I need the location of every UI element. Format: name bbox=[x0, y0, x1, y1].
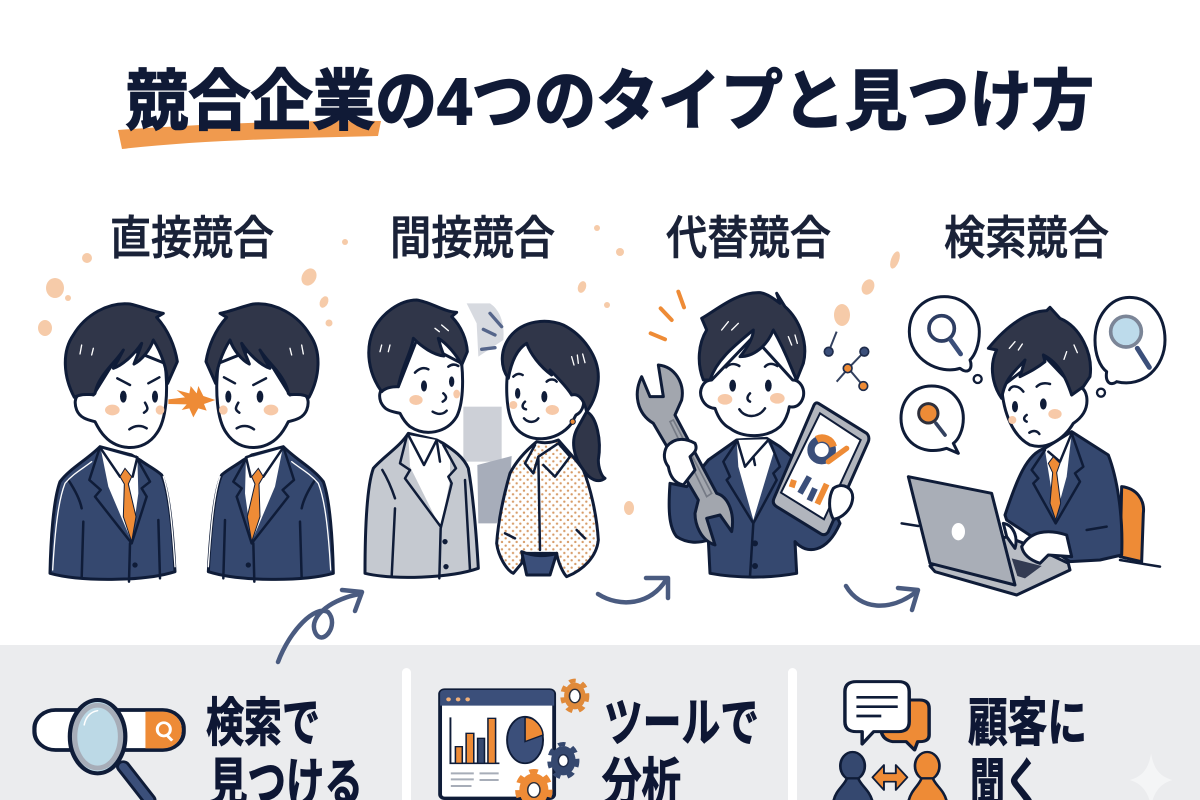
title: 競合企業の4つのタイプと見つけ方 bbox=[126, 64, 1094, 138]
man in grey suit bbox=[365, 300, 478, 578]
thought bubble with navy magnifier bbox=[909, 297, 982, 383]
man left bbox=[50, 304, 177, 582]
desk lines bbox=[902, 523, 1160, 567]
icon: chat bubbles and people bbox=[833, 682, 1173, 800]
hands on keyboard bbox=[1003, 523, 1072, 563]
label: find by search bbox=[206, 681, 363, 800]
icon: analytics window and gears bbox=[440, 681, 587, 800]
icon: orange clash spark bbox=[168, 386, 215, 417]
orange sparks bbox=[651, 292, 684, 339]
label: analyze with tools: ツールで bbox=[604, 681, 759, 756]
icon: tablet with charts bbox=[773, 403, 869, 535]
background grey shapes bbox=[463, 303, 512, 523]
hand holding wrench bbox=[664, 439, 696, 485]
heading: search competitors: 検索競合 bbox=[944, 202, 1109, 268]
figure: direct competitors facing off bbox=[50, 304, 333, 582]
label: ask customers bbox=[968, 681, 1087, 800]
icon: network nodes bbox=[824, 332, 869, 390]
heading: indirect competitors: 間接競合 bbox=[390, 202, 555, 268]
label: analyze with tools bbox=[602, 681, 759, 800]
icon: laptop bbox=[908, 477, 1070, 595]
face bbox=[701, 337, 804, 436]
arrow: to search competitors bbox=[846, 586, 918, 610]
gear navy middle bbox=[550, 744, 577, 777]
title underline brush bbox=[118, 121, 381, 149]
speech bubble with orange magnifier bbox=[901, 386, 963, 453]
label: find by search: 検索で bbox=[206, 681, 320, 756]
gear orange top bbox=[563, 681, 587, 711]
gear orange bottom bbox=[518, 771, 550, 800]
suit bbox=[1005, 432, 1122, 562]
hand holding tablet bbox=[830, 486, 853, 519]
icon: wrench bbox=[637, 365, 733, 545]
arrow: to substitute competitors bbox=[598, 578, 668, 602]
heading: direct competitors: 直接競合 bbox=[110, 202, 274, 268]
figure: search competitor at laptop bbox=[901, 297, 1165, 595]
decorative orange dots bbox=[38, 225, 902, 515]
suit bbox=[669, 438, 840, 577]
figure: substitute competitor with wrench and tablet bbox=[637, 292, 869, 577]
icon: search bar and magnifier bbox=[34, 700, 184, 800]
man right bbox=[206, 304, 333, 582]
heading: substitute competitors: 代替競合 bbox=[666, 202, 831, 268]
label: ask customers: 顧客に bbox=[968, 681, 1087, 756]
chair bbox=[1120, 487, 1144, 562]
panel: how to find competitors bbox=[0, 645, 1200, 800]
woman in dotted blouse bbox=[497, 321, 605, 577]
icon: sparkle watermark bbox=[1130, 753, 1173, 800]
figure: indirect competitors pair bbox=[365, 300, 605, 578]
face bbox=[1002, 355, 1087, 446]
thought bubble with blue magnifier bbox=[1095, 297, 1165, 397]
arrow: to indirect competitors bbox=[278, 590, 362, 662]
